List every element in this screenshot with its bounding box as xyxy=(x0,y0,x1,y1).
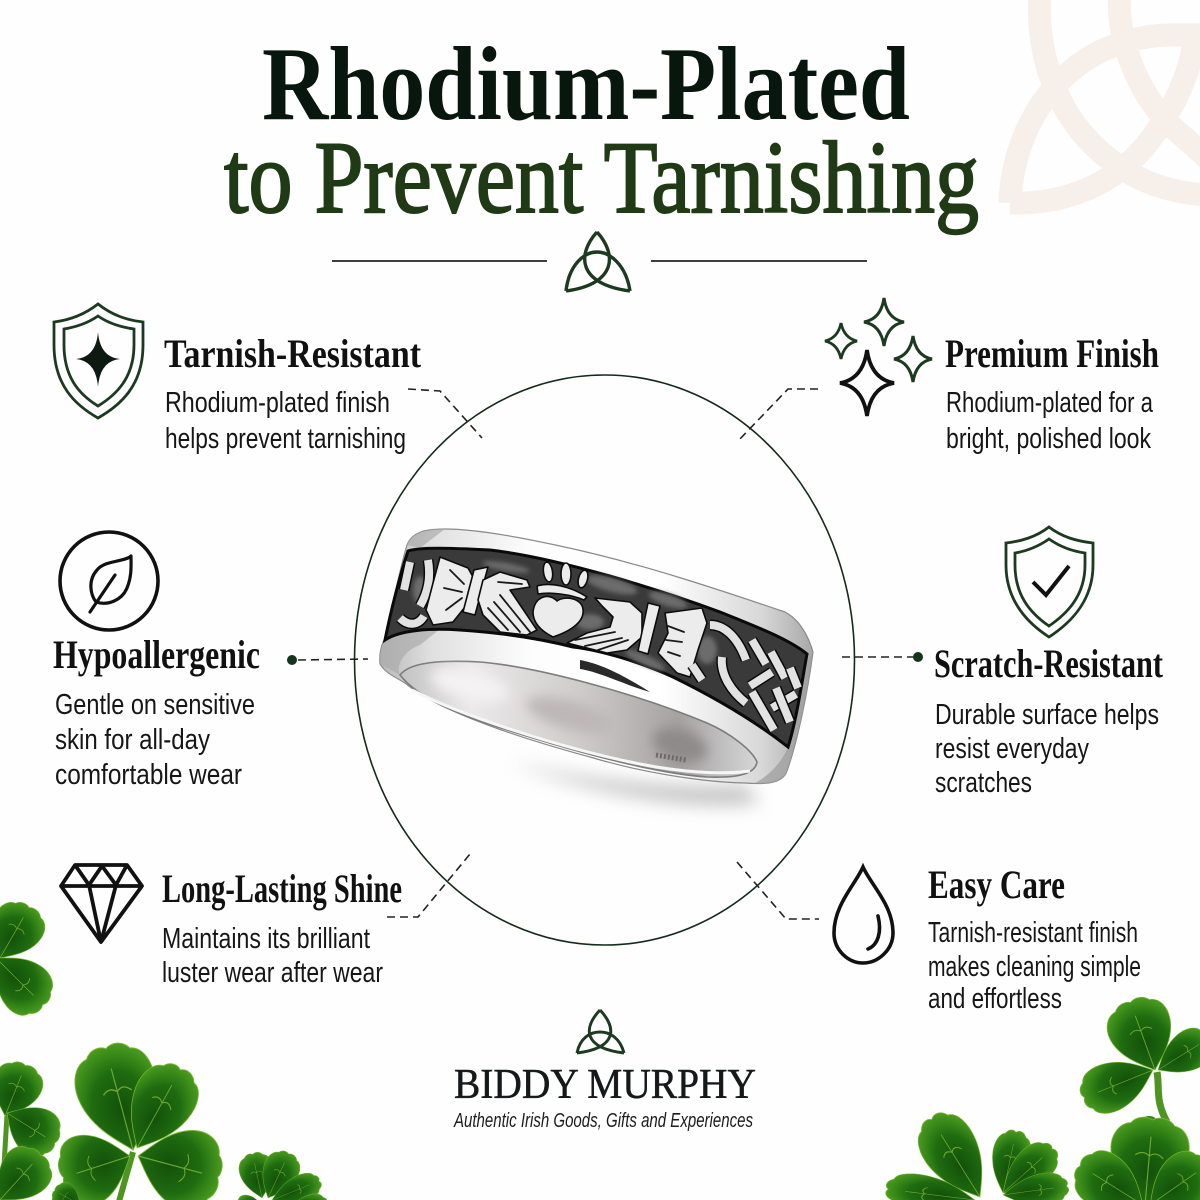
ring hallmark xyxy=(656,755,686,760)
description: Gentle on sensitive xyxy=(55,689,255,721)
title xyxy=(224,25,979,235)
description: helps prevent tarnishing xyxy=(165,423,406,455)
ring inner lip xyxy=(412,690,750,773)
crown xyxy=(537,561,590,600)
heading: Hypoallergenic xyxy=(53,632,260,677)
heading: Tarnish-Resistant xyxy=(164,331,422,376)
description: resist everyday xyxy=(935,733,1089,765)
central ellipse xyxy=(354,375,854,945)
shamrocks: bottom left xyxy=(0,1036,332,1200)
icon: trinity knot xyxy=(566,232,630,291)
panel: Long-Lasting Shine xyxy=(61,854,470,989)
ring right rim shading xyxy=(755,652,813,784)
panel: Tarnish-Resistant xyxy=(54,304,482,455)
icon: leaf in circle xyxy=(60,532,158,630)
connector xyxy=(408,389,482,438)
icon: shield with star xyxy=(54,304,143,418)
divider with trinity knot xyxy=(332,232,867,291)
brand logo xyxy=(453,1010,756,1132)
description: and effortless xyxy=(928,983,1062,1015)
right cuff xyxy=(638,603,660,654)
icon: water drop xyxy=(834,867,893,963)
left knot xyxy=(400,560,429,624)
panel: Easy Care xyxy=(737,862,1141,1015)
left bow xyxy=(426,557,473,625)
left cuff xyxy=(463,567,488,615)
ring left rim shading xyxy=(380,529,445,675)
description: bright, polished look xyxy=(946,423,1151,455)
heading: Long-Lasting Shine xyxy=(162,866,402,911)
right knot xyxy=(692,625,798,730)
heart xyxy=(533,596,583,637)
connector xyxy=(387,854,470,917)
description: scratches xyxy=(935,767,1032,799)
icon: diamond xyxy=(61,865,142,942)
description: comfortable wear xyxy=(55,759,242,791)
shamrocks: bottom right xyxy=(884,990,1200,1200)
icon: shield with check xyxy=(1006,527,1093,637)
connector xyxy=(737,862,819,919)
description: luster wear after wear xyxy=(162,957,383,989)
connector xyxy=(739,389,818,440)
panel: Hypoallergenic xyxy=(53,532,368,791)
ring body xyxy=(380,529,813,784)
tagline: Authentic Irish Goods, Gifts and Experiences xyxy=(453,1110,753,1132)
ring inner face xyxy=(400,661,757,777)
description: skin for all-day xyxy=(55,724,210,756)
description: Maintains its brilliant xyxy=(162,923,370,955)
brand name: BIDDY MURPHY xyxy=(454,1062,756,1108)
shamrocks: upper left xyxy=(0,893,63,1025)
watermark: Celtic trinity knot xyxy=(1010,0,1200,203)
connector xyxy=(287,655,368,665)
description: Rhodium-plated finish xyxy=(165,387,390,419)
right hand xyxy=(567,598,642,653)
rim dark wedge xyxy=(580,660,650,692)
icon: sparkles xyxy=(825,298,932,416)
ring photo xyxy=(380,529,813,804)
heading: Easy Care xyxy=(928,862,1065,907)
panel: Premium Finish xyxy=(739,298,1159,455)
band texture xyxy=(413,559,717,674)
title line 2: to Prevent Tarnishing xyxy=(224,121,979,235)
ring shadow xyxy=(510,762,760,804)
ring engraved band xyxy=(385,548,807,747)
left hand xyxy=(478,572,537,635)
connector xyxy=(842,652,923,662)
icon: logo knot xyxy=(577,1010,624,1053)
right bow xyxy=(658,608,707,677)
panel: Scratch-Resistant xyxy=(842,527,1164,799)
inner face reflections xyxy=(428,662,712,769)
title line 1: Rhodium-Plated xyxy=(262,25,910,142)
